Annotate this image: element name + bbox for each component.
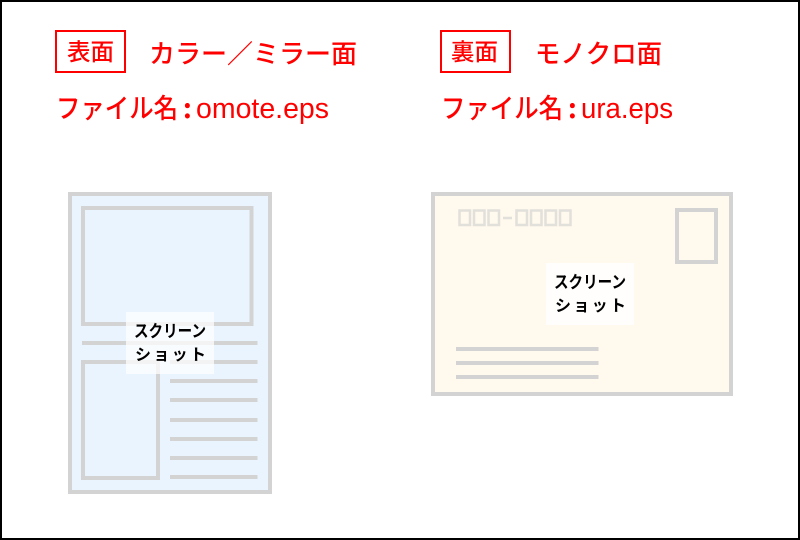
badge: back label bbox=[441, 31, 510, 72]
header: back side bbox=[441, 31, 673, 126]
badge: back label: 裏面 bbox=[451, 33, 498, 67]
panel: front card layout bbox=[70, 194, 270, 492]
screenshot label: back: スクリーン bbox=[554, 268, 626, 293]
file name: back: ファイル名 bbox=[441, 87, 563, 126]
screenshot label: back: ショット bbox=[555, 292, 626, 316]
file name: back: ura.eps bbox=[581, 93, 673, 125]
small image frame bbox=[83, 362, 158, 478]
header: front side bbox=[56, 31, 357, 126]
screenshot label: back bbox=[546, 263, 634, 325]
screenshot label: front: スクリーン bbox=[134, 317, 206, 342]
text lines bbox=[82, 341, 258, 479]
file name: front: : bbox=[183, 87, 192, 126]
postal code boxes bbox=[460, 210, 570, 225]
file name: back: : bbox=[568, 87, 577, 126]
file name: front bbox=[56, 87, 329, 126]
address lines bbox=[456, 347, 598, 379]
file name: front: omote.eps bbox=[196, 93, 329, 125]
stamp frame bbox=[677, 210, 716, 262]
heading: colour / mirror side: カラー／ミラー面 bbox=[149, 34, 357, 71]
file name: back bbox=[441, 87, 673, 126]
main image frame bbox=[83, 208, 252, 324]
screenshot label: front: ショット bbox=[135, 341, 206, 365]
file name: front: ファイル名 bbox=[56, 87, 178, 126]
screenshot label: front bbox=[126, 312, 214, 374]
panel: back card layout bbox=[433, 194, 731, 394]
badge: front label bbox=[56, 31, 125, 72]
badge: front label: 表面 bbox=[67, 33, 114, 67]
heading: monochrome side: モノクロ面 bbox=[535, 34, 662, 71]
